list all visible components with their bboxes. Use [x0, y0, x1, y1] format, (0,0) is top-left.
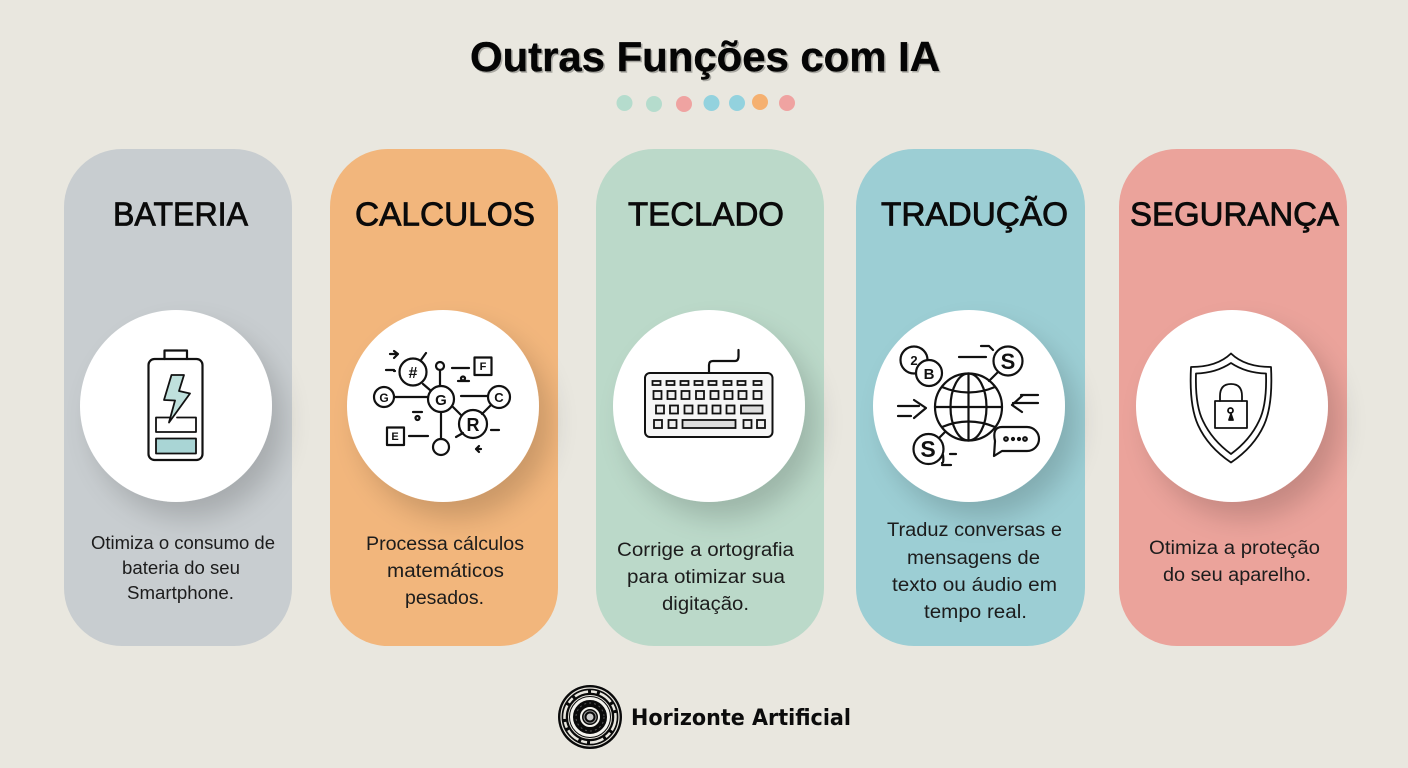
- icon circle: seguranca: [1136, 310, 1328, 502]
- description: bateria: Otimiza o consumo de: [91, 533, 275, 553]
- description: calculos: pesados.: [405, 588, 484, 609]
- icon: globe translation: 2: [910, 353, 918, 368]
- heading: seguranca: SEGURANÇA: [1130, 196, 1339, 232]
- icon circle: calculos: [347, 310, 539, 502]
- description: seguranca: do seu aparelho.: [1163, 565, 1311, 586]
- panel: bateria: [64, 149, 292, 646]
- icon: keyboard: [645, 350, 772, 437]
- icon circle: traducao: [873, 310, 1065, 502]
- heading: bateria: BATERIA: [113, 196, 248, 232]
- description: traducao: tempo real.: [924, 602, 1027, 623]
- icon: globe translation: S: [920, 436, 936, 462]
- icon: calculation network: [374, 351, 510, 455]
- icon: calculation network: G: [435, 392, 447, 409]
- brand logo: [558, 685, 622, 749]
- description: traducao: mensagens de: [907, 548, 1040, 569]
- icon: globe translation: S: [1001, 349, 1015, 374]
- description: seguranca: [1149, 538, 1320, 586]
- icon: calculation network: E: [391, 431, 399, 443]
- panel: calculos: [330, 149, 558, 646]
- icon: shield with padlock: [1191, 354, 1271, 462]
- description: bateria: [91, 533, 275, 603]
- heading: calculos: CALCULOS: [355, 196, 535, 232]
- description: bateria: Smartphone.: [127, 583, 234, 603]
- heading: traducao: TRADUÇÃO: [881, 196, 1068, 232]
- icon: battery: [148, 350, 202, 460]
- decorative colored dots: [616, 94, 795, 112]
- description: calculos: Processa cálculos: [366, 534, 524, 555]
- description: traducao: [887, 520, 1062, 623]
- icon circle: bateria: [80, 310, 272, 502]
- panel: traducao: [856, 149, 1085, 646]
- description: calculos: [366, 534, 524, 609]
- brand name: Horizonte Artificial: [631, 706, 851, 731]
- icon: calculation network: F: [480, 361, 487, 373]
- icon: globe translation: B: [924, 366, 935, 383]
- description: calculos: matemáticos: [387, 561, 504, 582]
- icon circle: teclado: [613, 310, 805, 502]
- description: traducao: Traduz conversas e: [887, 520, 1062, 541]
- panel: seguranca: [1119, 149, 1347, 646]
- panel: teclado: [596, 149, 824, 646]
- icon: calculation network: #: [409, 365, 418, 382]
- description: traducao: texto ou áudio em: [892, 575, 1057, 596]
- description: teclado: para otimizar sua: [627, 567, 785, 588]
- heading: teclado: TECLADO: [628, 196, 784, 232]
- icon: calculation network: R: [466, 415, 480, 435]
- description: seguranca: Otimiza a proteção: [1149, 538, 1320, 559]
- title: Outras Funções com IA: [472, 34, 942, 82]
- icon: calculation network: C: [494, 390, 504, 405]
- icon: calculation network: G: [379, 391, 389, 405]
- description: teclado: Corrige a ortografia: [617, 540, 794, 561]
- icon: globe translation: [898, 346, 1039, 465]
- description: teclado: [617, 540, 794, 615]
- description: teclado: digitação.: [662, 594, 749, 615]
- description: bateria: bateria do seu: [122, 558, 240, 578]
- title: Outras Funções com IA: [470, 33, 940, 80]
